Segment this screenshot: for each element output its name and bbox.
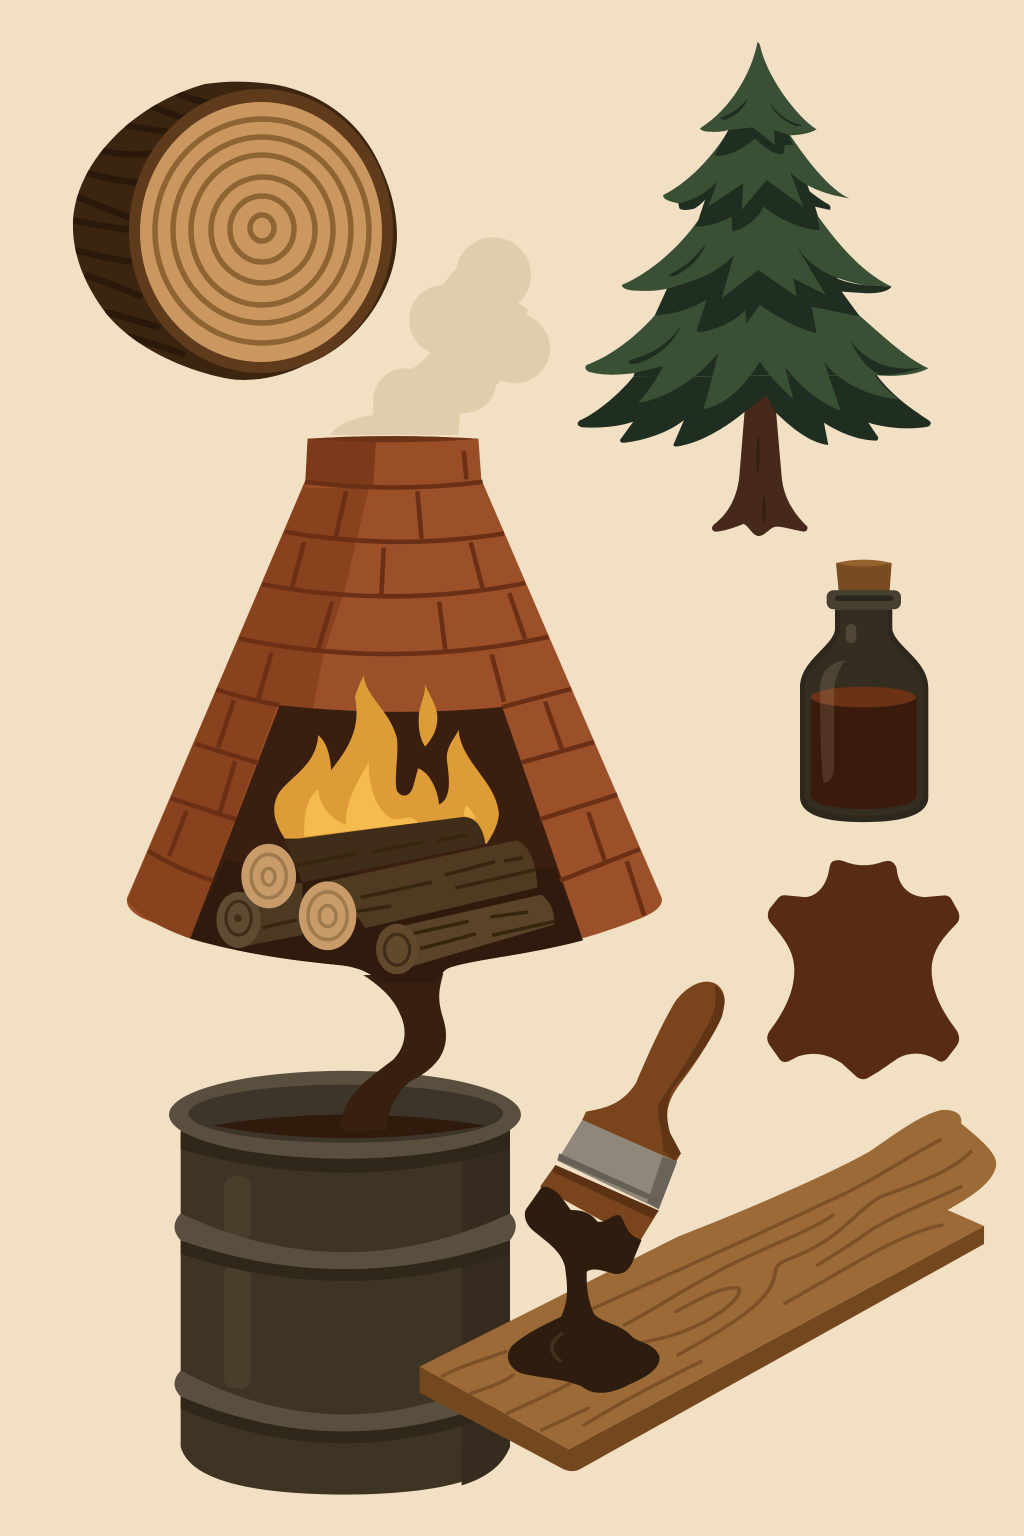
icon: wooden plank with grain [420, 1110, 996, 1471]
icon: smoke rising from the kiln [330, 237, 550, 435]
icon: paint brush dripping tar onto plank [508, 982, 725, 1393]
icon: metal barrel [169, 1071, 521, 1495]
kiln opening [190, 705, 583, 982]
flames [274, 675, 499, 844]
icon: tar stream pouring from kiln into barrel [340, 973, 446, 1132]
brick mortar lines [148, 451, 644, 916]
icon: dark glass bottle with cork [800, 560, 928, 822]
kiln shaded side [127, 481, 369, 939]
icon: pine tree [578, 42, 931, 536]
stacked logs [237, 882, 302, 947]
icon: log cross-section with growth rings [70, 82, 397, 380]
kiln body [127, 481, 662, 968]
icon: brick kiln with fire and logs [127, 436, 662, 982]
kiln chimney cap [305, 436, 482, 488]
icon: leather hide [767, 860, 959, 1079]
